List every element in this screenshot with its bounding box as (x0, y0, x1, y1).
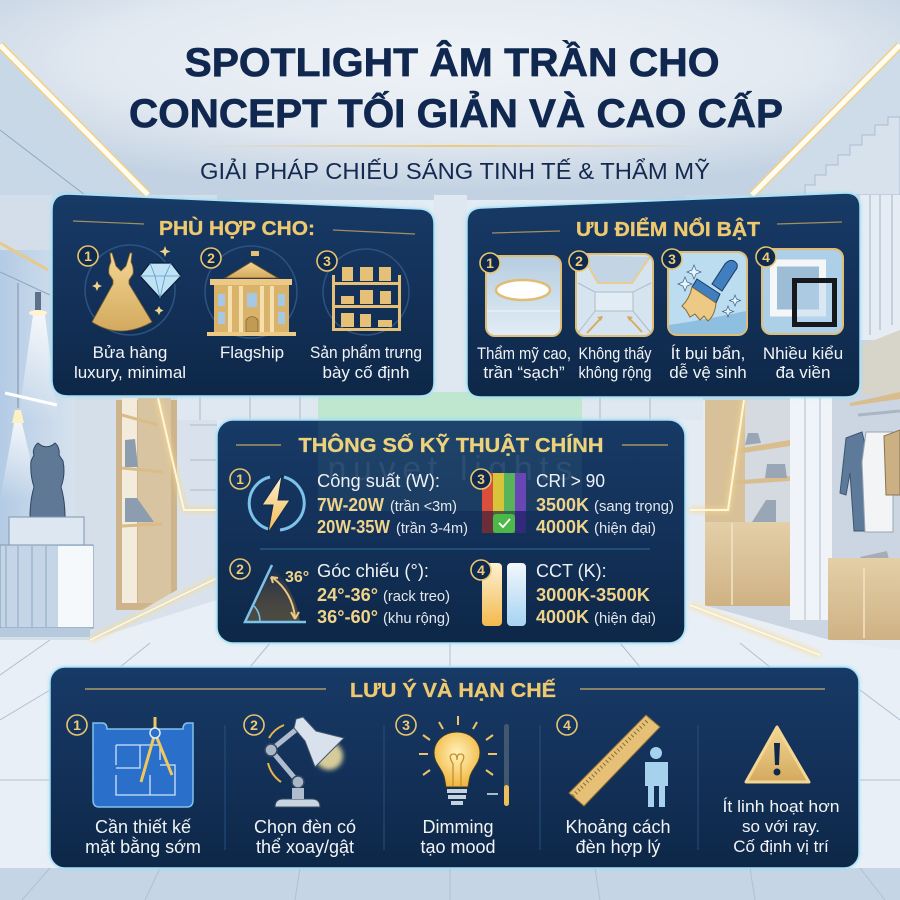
subtitle: GIẢI PHÁP CHIẾU SÁNG TINH TẾ & THẨM MỸ (200, 156, 710, 184)
icon: color swatches (482, 473, 526, 533)
title (129, 39, 783, 136)
floor (0, 600, 900, 900)
label: Nhiều kiểu (763, 344, 843, 363)
item: limitation: so với ray. (742, 817, 820, 836)
panel: suitable for (52, 194, 434, 396)
spec: beam angle: 36°-60° (317, 607, 378, 627)
icon: person (645, 747, 668, 807)
spec: power: 7W-20W (317, 495, 384, 515)
spec: CRI: 3500K (536, 495, 589, 515)
icon: warning (746, 727, 809, 782)
heading: advantages (492, 217, 842, 241)
spec: power: (trần 3-4m) (396, 521, 468, 537)
badge 4: 4 (477, 562, 485, 578)
spec: beam angle: 24°-36° (317, 585, 378, 605)
label: Cần thiết kế (95, 817, 191, 837)
label: Bửa hàng (93, 343, 167, 362)
icon: desk lamp (265, 717, 344, 807)
badge 1: 1 (73, 717, 81, 733)
icon: ruler (569, 715, 660, 806)
item: spacing: đèn hợp lý (576, 837, 660, 857)
divider under title (200, 145, 710, 147)
heading: advantages: ƯU ĐIỂM NỔI BẬT (576, 217, 760, 241)
spec: CRI: (sang trọng) (594, 499, 674, 515)
badge 1: 1 (84, 248, 92, 264)
watermark overlay (318, 421, 582, 511)
panel: specs (217, 420, 685, 643)
item: dust free: dễ vệ sinh (669, 363, 747, 382)
label: Chọn đèn có (254, 817, 356, 837)
watermark: green box behind panels (318, 392, 582, 422)
item: tilting lamp (244, 715, 356, 857)
spec: beam angle (230, 559, 450, 627)
badge 4 (557, 715, 577, 735)
icon: blueprint (93, 717, 193, 807)
icon: shelves (332, 267, 401, 331)
spec: power: (trần <3m) (390, 499, 457, 515)
icon: bulb (419, 716, 497, 805)
badge 3: 3 (477, 471, 485, 487)
label: Flagship (220, 343, 284, 362)
badge 2 (244, 715, 264, 735)
text: Góc chiếu (°): (317, 561, 429, 581)
icon: brush (678, 260, 740, 321)
spec: CRI: 4000K (536, 517, 589, 537)
label: Khoảng cách (565, 817, 671, 837)
panel: advantages (467, 193, 860, 397)
badge 3 (396, 715, 416, 735)
item: clean ceiling: trần “sạch” (483, 363, 565, 382)
thumbnail (668, 252, 747, 335)
heading: notes: LƯU Ý VÀ HẠN CHẾ (350, 678, 556, 702)
thumbnail (576, 254, 653, 336)
spec: CCT: 3000K-3500K (536, 585, 650, 605)
heading: specs: THÔNG SỐ KỸ THUẬT CHÍNH (298, 433, 604, 457)
spec: CRI: (hiện đại) (594, 521, 656, 537)
icon: diamond (140, 263, 181, 298)
area between panels (434, 195, 467, 400)
text: Công suất (W): (317, 471, 440, 491)
badge 3: 3 (668, 251, 676, 267)
icon: dimmer slider (487, 724, 509, 806)
badge 2: 2 (250, 717, 258, 733)
label: Ít linh hoạt hơn (722, 797, 840, 816)
icon: bolt (249, 475, 304, 533)
right store (685, 195, 900, 640)
item: dimming: tạo mood (420, 837, 496, 857)
title: SPOTLIGHT ÂM TRẦN CHO (184, 39, 720, 85)
ceiling strips (0, 45, 900, 195)
item: spacing (557, 715, 671, 857)
panel: notes (50, 667, 859, 868)
item: limitation: Cố định vị trí (733, 837, 829, 856)
item: many trims: đa viền (776, 363, 830, 382)
badge 2: 2 (207, 250, 215, 266)
item: tilting lamp: thể xoay/gật (256, 837, 354, 857)
badge 4 (471, 560, 491, 580)
item: boutique (74, 245, 186, 382)
item: floor plan: mặt bằng sớm (85, 836, 201, 857)
badge 1 (67, 715, 87, 735)
label: Sản phẩm trưng (310, 343, 422, 362)
item: hidden fixture (569, 251, 653, 382)
badge 1: 1 (236, 471, 244, 487)
spec: CCT: 4000K (536, 607, 589, 627)
text: CCT (K): (536, 561, 607, 581)
badge 2: 2 (575, 253, 583, 269)
icon: sparkles (92, 246, 170, 315)
spec: CCT (471, 560, 656, 627)
watermark overlay: nuvet lights (328, 450, 572, 488)
badge 2 (230, 559, 250, 579)
badge 3: 3 (323, 253, 331, 269)
heading: suitable for: PHÙ HỢP CHO: (159, 216, 315, 240)
item: flagship (201, 246, 297, 362)
icon: check mark (493, 514, 515, 533)
item: fixed display: bày cố định (323, 363, 409, 382)
badge 3: 3 (402, 717, 410, 733)
badge 2: 2 (236, 561, 244, 577)
spec: beam angle: (rack treo) (383, 589, 450, 605)
text: CRI > 90 (536, 471, 605, 491)
thumbnail (762, 249, 843, 334)
item: fixed display (310, 249, 422, 382)
left store (0, 195, 217, 640)
icon: warm and cool bars (482, 563, 526, 626)
item: many trims (756, 247, 843, 382)
heading: suitable for (73, 216, 415, 240)
spec: power (230, 469, 468, 537)
spec: CRI (471, 469, 674, 537)
item: dimming (396, 715, 509, 857)
item: clean ceiling (477, 253, 571, 382)
label: Ít bụi bẩn, (671, 344, 745, 363)
spec: beam angle: (khu rộng) (383, 611, 450, 627)
spec: power: 20W-35W (317, 517, 390, 537)
item: dust free (662, 249, 747, 382)
item: hidden fixture: không rộng (578, 363, 652, 382)
icon: dress (92, 253, 152, 331)
badge 4: 4 (762, 249, 770, 265)
badge 1 (230, 469, 250, 489)
badge 1: 1 (486, 255, 494, 271)
item: limitation (722, 727, 840, 856)
thumbnail (486, 256, 561, 336)
title: CONCEPT TỐI GIẢN VÀ CAO CẤP (129, 90, 783, 136)
icon: angle (245, 565, 309, 622)
badge 4: 4 (563, 717, 571, 733)
item: boutique: luxury, minimal (74, 363, 186, 382)
spec: CCT: (hiện đại) (594, 611, 656, 627)
item: floor plan (67, 715, 201, 857)
label: Thẩm mỹ cao, (477, 344, 571, 363)
icon: building (207, 251, 296, 336)
label: Không thấy (578, 344, 652, 363)
label: Dimming (422, 817, 494, 837)
badge 3 (471, 469, 491, 489)
icon: angle: 36° (285, 569, 309, 586)
